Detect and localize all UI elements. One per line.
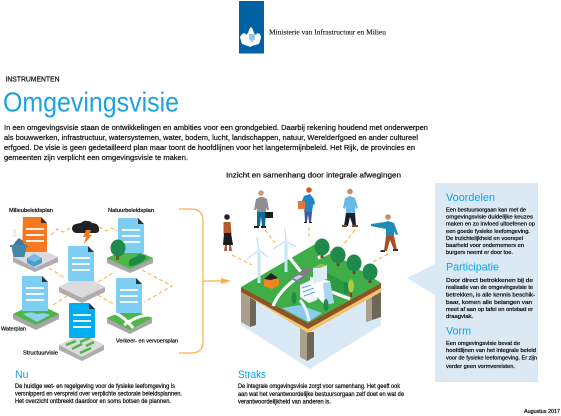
sub: vorm: Vorm	[446, 326, 471, 338]
intro text: gemeenten zijn verplicht een omgevingsvisie te maken.	[4, 153, 188, 162]
text block: nu: De huidige wet- en regelgeving voor de fysieke leefomgeving is	[15, 384, 175, 390]
sub: participatie: Door direct betrokkenen bij de	[446, 278, 533, 284]
sub: vorm: Een omgevingsvisie bevat de	[446, 341, 520, 347]
logo: ministry of infrastructure	[239, 1, 387, 54]
logo: ministry of infrastructure: Ministerie van Infrastructuur en Milieu	[269, 30, 387, 36]
plan: natuurbeleidsplan	[107, 208, 154, 273]
icon: storm cloud	[72, 221, 99, 244]
sub: voordelen: Een bestuursorgaan kan met de	[446, 208, 526, 214]
sub: voordelen: baarheid voor ondernemers en	[446, 243, 524, 249]
person: woman in brown	[223, 214, 233, 251]
panel: voordelen, participatie, vorm	[407, 183, 538, 382]
sub: voordelen: maken en zo invloed uitoefenen op	[446, 222, 535, 228]
sub: vorm: verder geen vormvereisten.	[446, 364, 515, 370]
sub: voordelen: De inzichtelijkheid en voorspel	[446, 236, 523, 242]
sub: vorm: hoofdlijnen van het integrale beleid	[446, 348, 536, 354]
intro text	[4, 123, 428, 162]
sub: participatie: realisatie van de omgevingsvisie te	[446, 285, 533, 291]
text block: nu: Nu	[15, 369, 28, 381]
intro text: erfgoed. De visie is geen gedetailleerd plan maar toont de hoofdlijnen voor het langetermijnbeleid. Het Rijk, de provincies en	[4, 143, 415, 152]
sub: building	[290, 267, 313, 283]
sub: participatie	[446, 262, 535, 320]
heading: inzicht en samenhang: Inzicht en samenhang door integrale afwegingen	[226, 170, 401, 180]
person: man pointing	[371, 214, 398, 252]
text block: straks: verantwoordelijkheid van anderen is.	[238, 400, 331, 406]
sub: vorm: voor de fysieke leefomgeving. Er zijn	[446, 356, 537, 362]
plan: waterplan	[1, 276, 59, 332]
plan: verkeer- en vervoersplan	[107, 278, 178, 344]
sub: voordelen	[446, 192, 535, 256]
sub: voordelen: burgers neemt er door toe.	[446, 250, 513, 256]
plan: waterplan: Waterplan	[1, 326, 26, 332]
text block: nu: Het overzicht ontbreekt daardoor en soms botsen de plannen.	[15, 399, 171, 405]
illustration: landscape block	[241, 228, 381, 369]
text block: nu	[15, 369, 182, 405]
dashed lines from people to landscape	[232, 227, 388, 265]
sub: participatie: meet af aan op tafel en ontstaat er	[446, 307, 533, 313]
date: Augustus 2017	[524, 409, 560, 415]
sub: windmills	[247, 228, 296, 283]
sub: participatie: draagvlak.	[446, 314, 473, 320]
text block: straks: De integrale omgevingsvisie zorgt voor samenhang. Het geeft ook	[238, 384, 401, 390]
kicker: instrumenten: INSTRUMENTEN	[6, 74, 60, 84]
sub: water	[282, 305, 322, 322]
sub: voordelen: een goede fysieke leefomgeving.	[446, 229, 530, 235]
plan: natuurbeleidsplan: Natuurbeleidsplan	[108, 208, 154, 214]
intro text: In een omgevingsvisie staan de ontwikkelingen en ambities voor een grondgebied. Daarbij rekening houdend met onderwerpen	[4, 123, 428, 132]
person: man with briefcase	[254, 190, 273, 228]
text block: straks: Straks	[238, 369, 266, 381]
arrow: bracket to integrated vision	[179, 209, 231, 353]
text block: nu: versnipperd en verspreid over verplichte sectorale beleidsplannen.	[15, 392, 182, 398]
plan: structuurvisie	[23, 303, 104, 361]
sub: participatie: baar, komen alle belangen van	[446, 300, 532, 306]
sub: vorm	[446, 326, 537, 370]
intro text: als bouwwerken, infrastructuur, watersystemen, water, bodem, lucht, landschappen, natuur, Werelderfgoed en ander cultureel	[4, 133, 418, 142]
text block: straks: aan wat het verantwoordelijke bestuursorgaan zelf doet en wat de	[238, 392, 405, 398]
sub: trees	[292, 238, 378, 311]
plan: central document	[59, 246, 105, 303]
dashed connections between plans	[49, 227, 172, 305]
sub: roads	[273, 252, 350, 306]
sub: house	[264, 276, 279, 289]
sub: voordelen: Voordelen	[446, 192, 495, 204]
text block: straks	[238, 369, 405, 406]
title: Omgevingsvisie	[3, 86, 179, 118]
sub: participatie: Participatie	[446, 262, 499, 274]
plan: structuurvisie: Structuurvisie	[23, 350, 58, 356]
sub: voordelen: omgevingsvisie duidelijke keuzes	[446, 214, 533, 220]
sub: participatie: betrekken, is alle kennis beschik-	[446, 292, 535, 298]
plan: milieubeleidsplan: Milieubeleidsplan	[9, 208, 53, 214]
plan: milieubeleidsplan	[9, 208, 58, 272]
person: man in light blue	[342, 189, 358, 227]
plan: verkeer- en vervoersplan: Verkeer- en vervoersplan	[116, 338, 178, 344]
person: woman with folder	[298, 187, 315, 223]
